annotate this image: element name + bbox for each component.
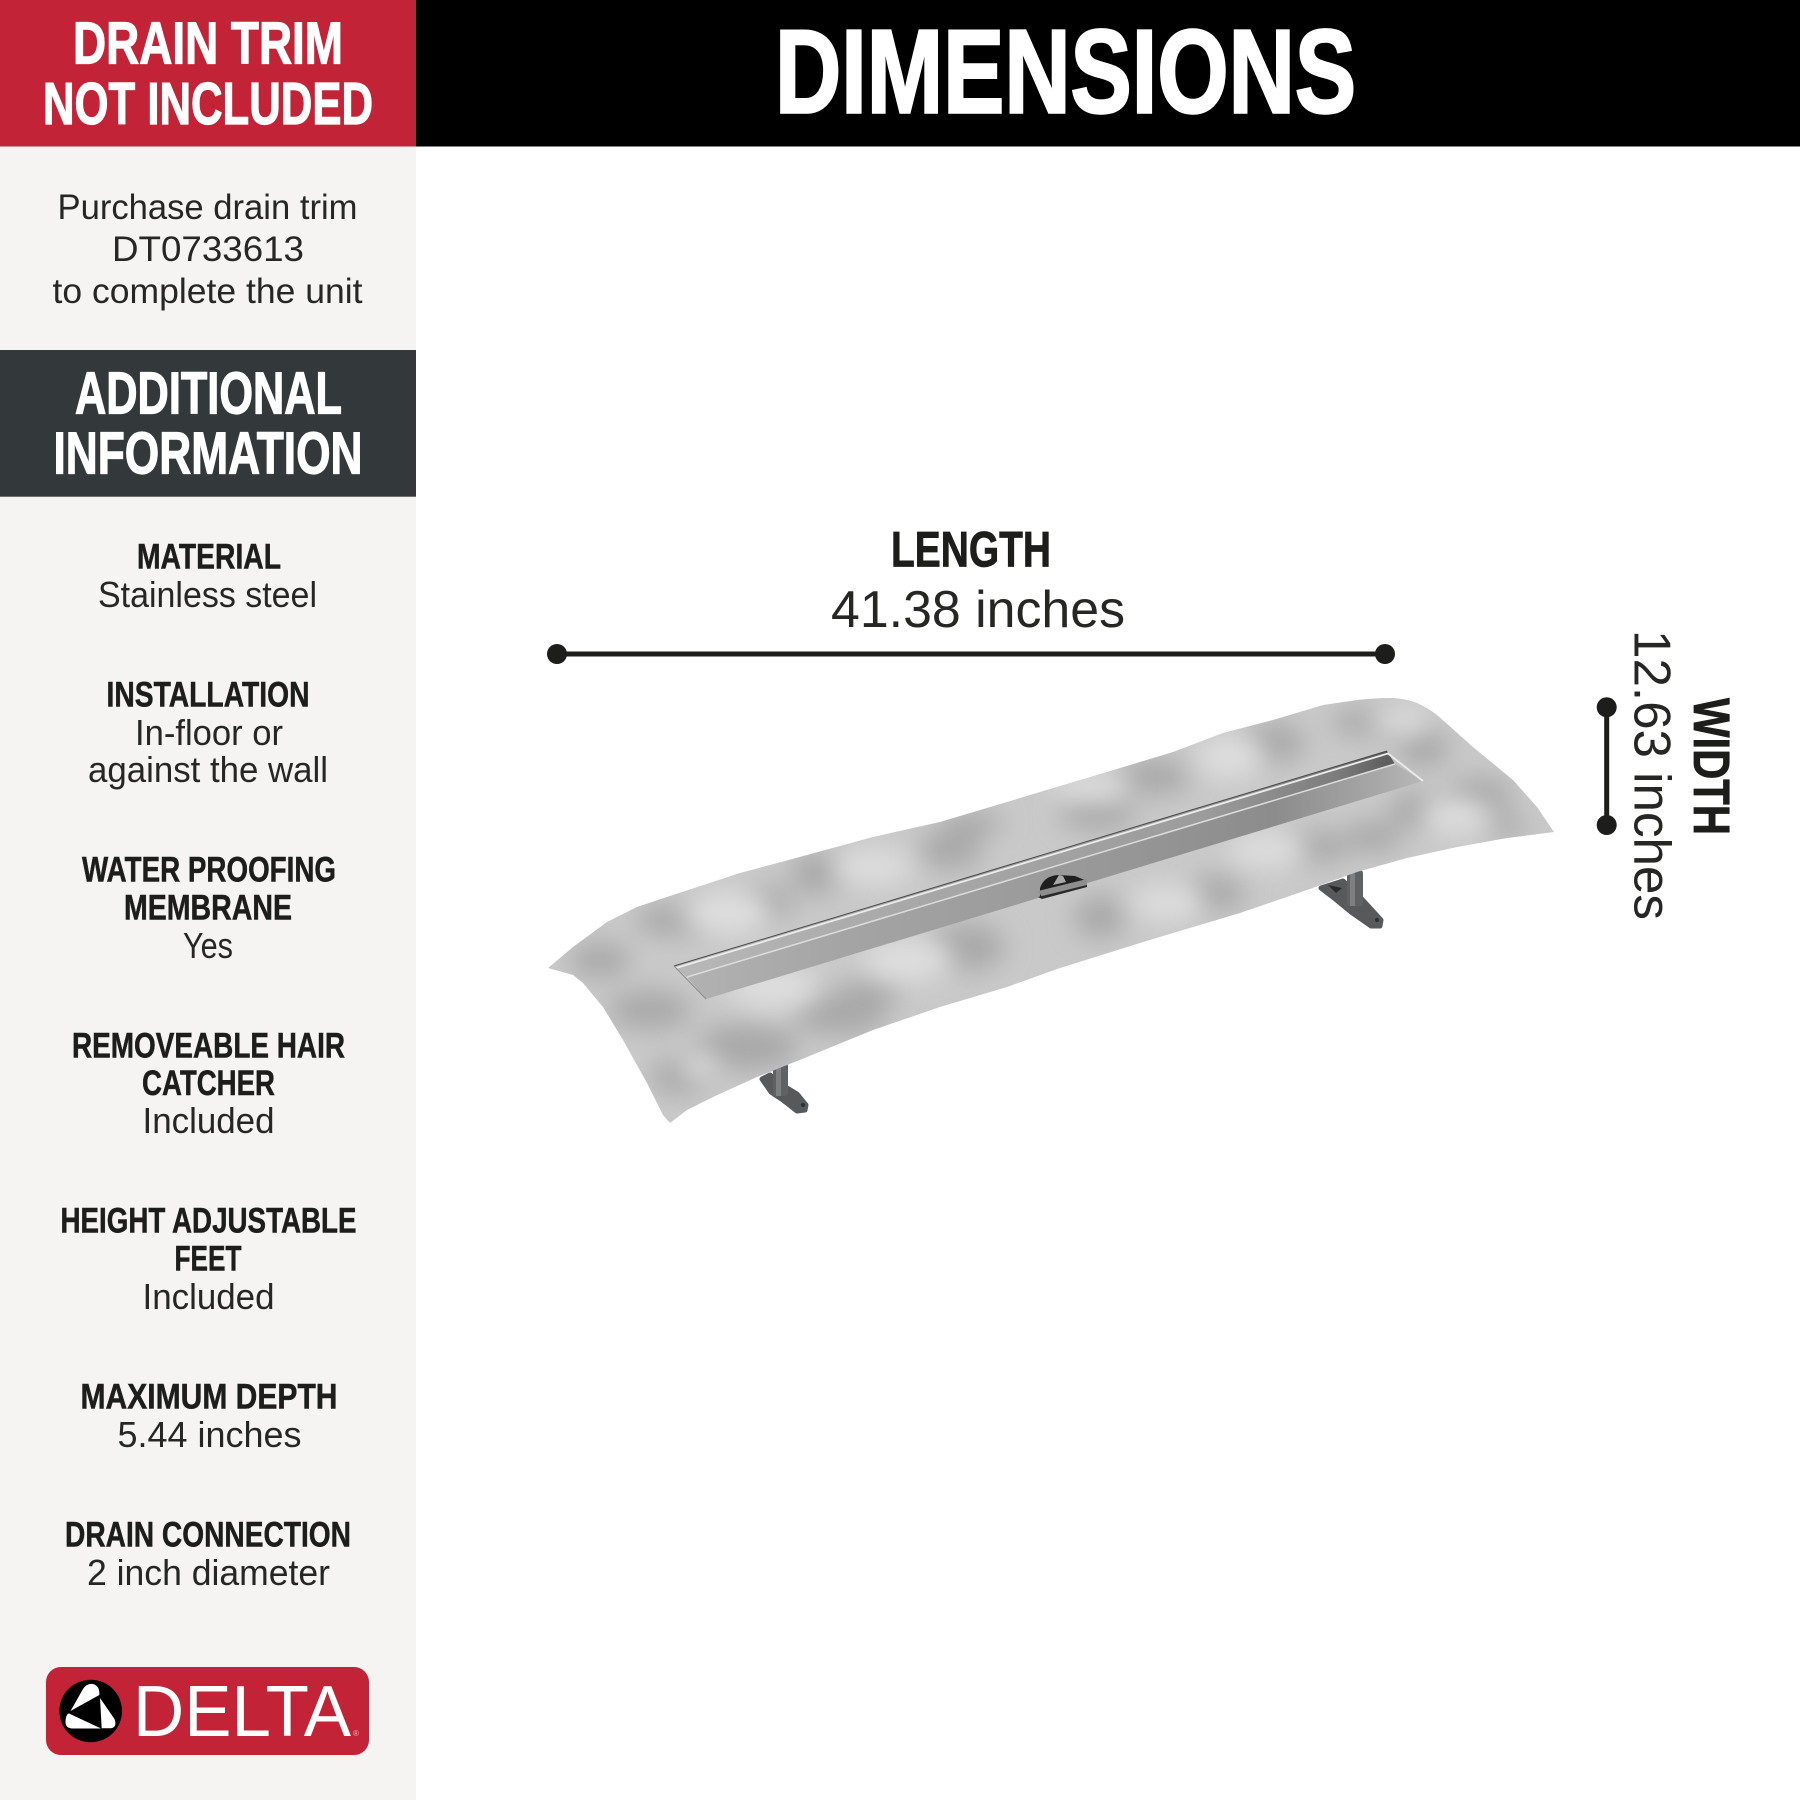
dimension line: length [547,644,1395,664]
spec: material: MATERIAL [137,537,281,577]
spec: height adjustable feet: FEET [174,1239,242,1279]
spec: material: Stainless steel [98,574,317,615]
spec: maximum depth: 5.44 inches [118,1414,302,1455]
title: dimensions [416,0,1800,146]
product: linear drain with membrane [548,698,1554,1123]
spec: water proofing membrane: MEMBRANE [124,887,292,927]
banner: drain trim not included [0,0,416,146]
spec: maximum depth [80,1377,338,1455]
label: width: WIDTH [1683,698,1740,835]
spec: water proofing membrane: Yes [183,925,233,966]
title: dimensions: DIMENSIONS [775,6,1356,138]
text block: purchase note: Purchase drain trim [58,188,358,227]
spec: installation: INSTALLATION [106,674,310,714]
banner: drain trim not included: DRAIN TRIM [73,10,343,76]
label: length: 41.38 inches [831,581,1125,639]
spec: removeable hair catcher [72,1025,345,1141]
spec: removeable hair catcher: CATCHER [142,1063,275,1103]
text block: purchase note: to complete the unit [52,272,363,311]
label: width: 12.63 inches [1623,630,1681,920]
logo: delta: DELTA [133,1671,352,1752]
foot: left adjustable foot [762,1060,806,1111]
label: width [1623,630,1740,920]
text block: purchase note: DT0733613 [112,230,304,269]
spec: drain connection: DRAIN CONNECTION [65,1515,351,1555]
text block: purchase note [52,188,363,311]
label: length [831,522,1125,639]
label: length: LENGTH [891,522,1051,578]
dimension line: width [1597,697,1617,835]
spec: maximum depth: MAXIMUM DEPTH [80,1377,338,1417]
membrane sheet [548,698,1554,1123]
spec: removeable hair catcher: REMOVEABLE HAIR [72,1025,345,1065]
spec: drain connection: 2 inch diameter [87,1552,330,1593]
panel: sidebar background [0,146,416,1800]
drain channel [674,751,1423,999]
spec: installation [88,674,328,790]
spec: height adjustable feet: Included [142,1276,274,1317]
hair catcher [1038,875,1087,899]
heading: additional information [0,350,416,497]
spec: height adjustable feet [60,1201,356,1317]
logo: delta [46,1667,369,1755]
spec: installation: In-floor or [135,712,283,753]
banner: drain trim not included: NOT INCLUDED [43,71,373,137]
foot: right adjustable foot [1321,870,1381,926]
spec: material [98,537,317,615]
heading: additional information: INFORMATION [54,420,362,486]
spec: water proofing membrane [82,850,336,966]
heading: additional information: ADDITIONAL [75,360,342,426]
spec: height adjustable feet: HEIGHT ADJUSTABLE [60,1201,356,1241]
spec: water proofing membrane: WATER PROOFING [82,850,336,890]
spec: drain connection [65,1515,351,1593]
logo: delta: ® [353,1729,359,1738]
spec: removeable hair catcher: Included [142,1100,274,1141]
spec: installation: against the wall [88,749,328,790]
